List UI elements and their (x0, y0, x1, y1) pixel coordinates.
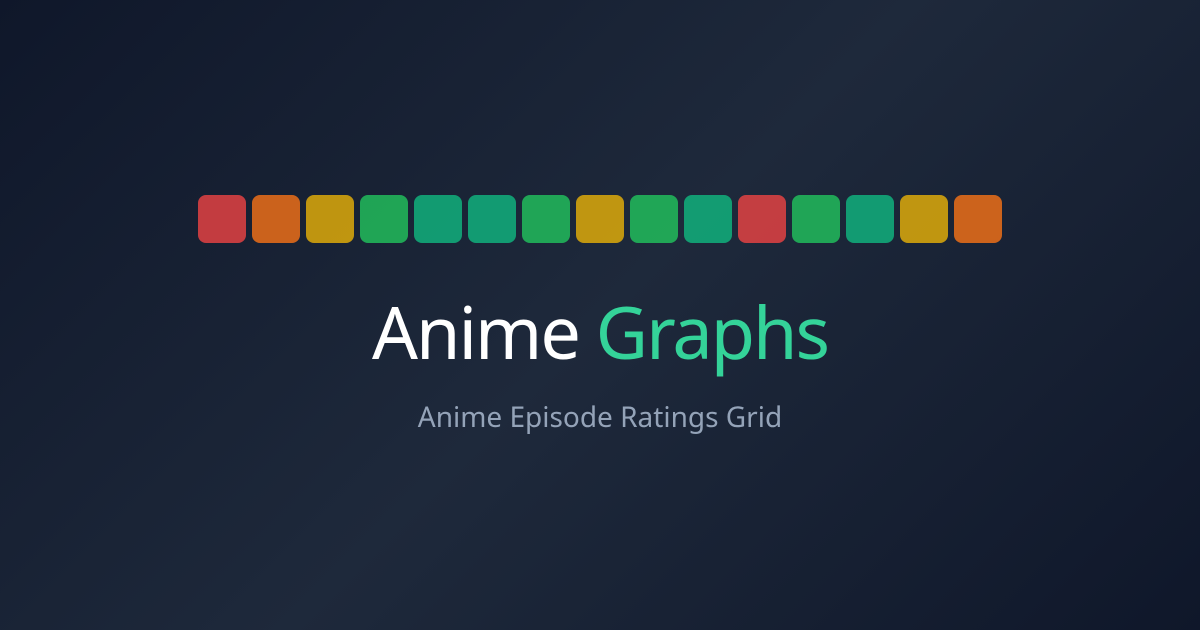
tile: teal (684, 195, 732, 243)
tile: yellow (306, 195, 354, 243)
tile: orange (252, 195, 300, 243)
tile: green (630, 195, 678, 243)
subtitle: Anime Episode Ratings Grid (418, 398, 782, 436)
tile: red (738, 195, 786, 243)
episode ratings colour strip (198, 195, 1002, 243)
tile: green (522, 195, 570, 243)
tile: red (198, 195, 246, 243)
tile: teal (846, 195, 894, 243)
tile: green (360, 195, 408, 243)
tile: orange (954, 195, 1002, 243)
tile: green (792, 195, 840, 243)
title: Anime Graphs (372, 283, 828, 381)
tile: teal (414, 195, 462, 243)
tile: teal (468, 195, 516, 243)
tile: yellow (576, 195, 624, 243)
tile: yellow (900, 195, 948, 243)
